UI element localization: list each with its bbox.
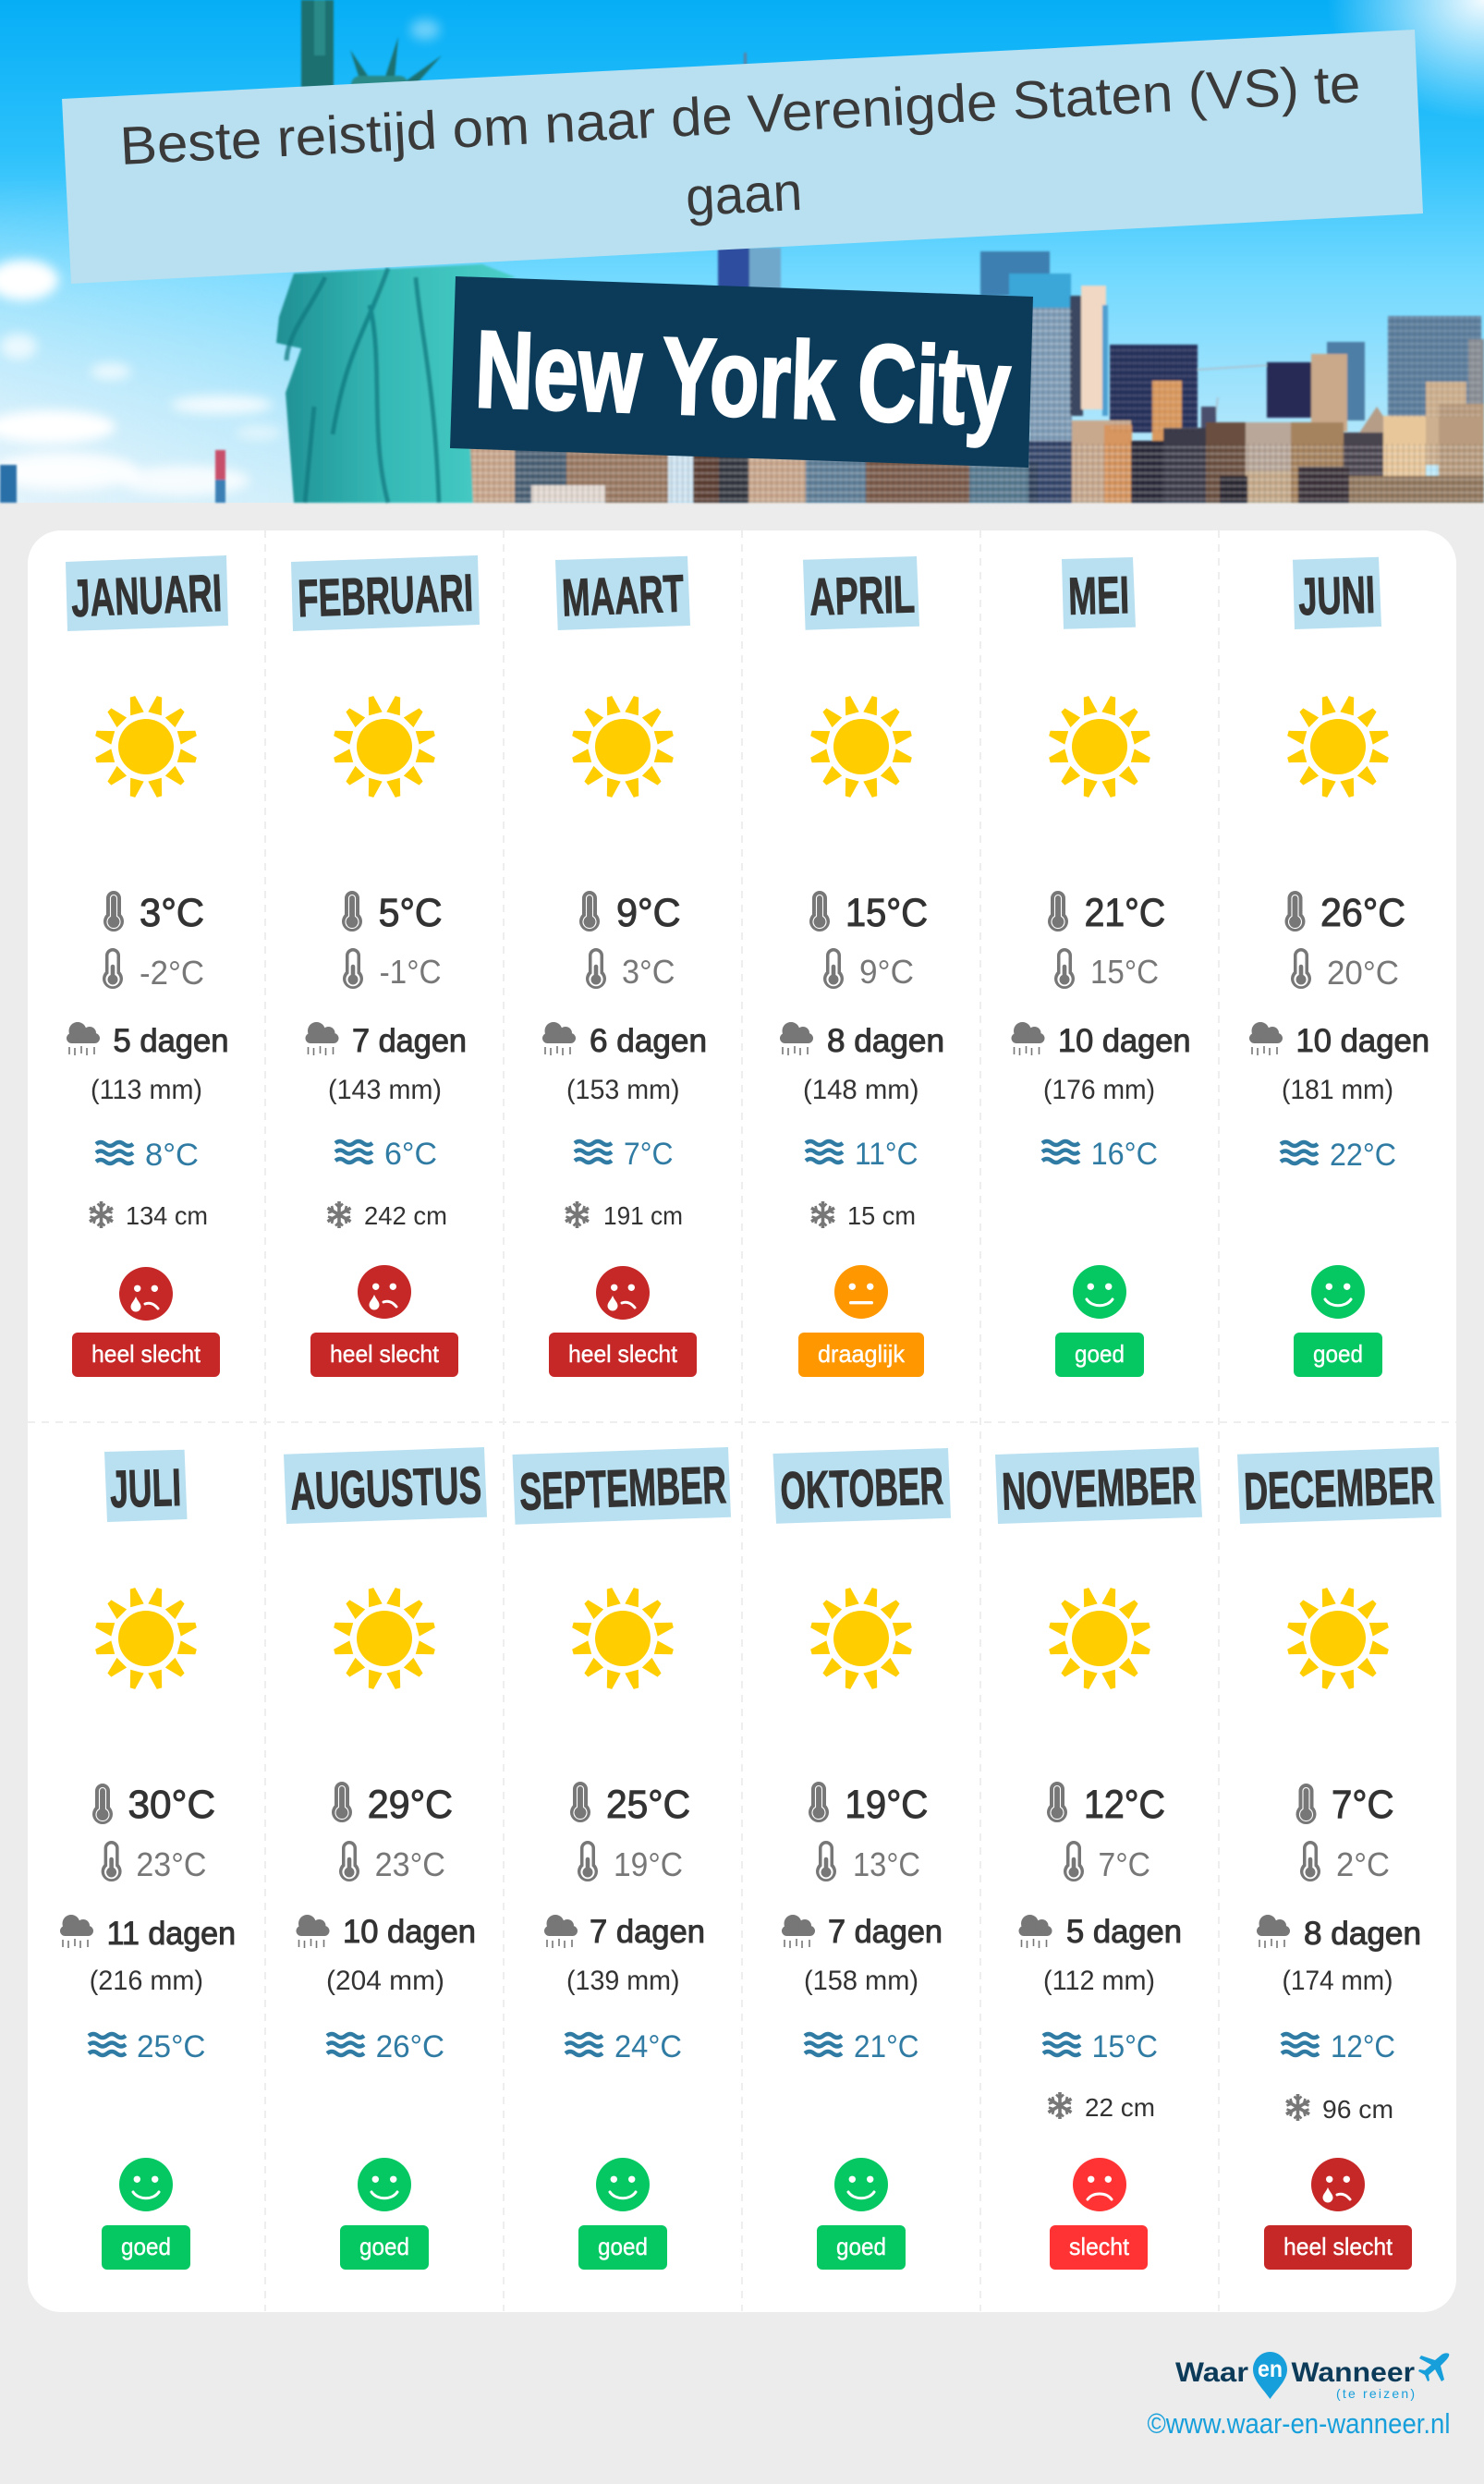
low temperature [816,1841,920,1883]
low temperature [339,1841,445,1883]
water temperature: 16°C [1091,1137,1158,1172]
icon: sun [809,695,913,798]
high temperature [1284,891,1405,935]
rating face [596,2158,650,2211]
rainfall: (143 mm) [328,1075,442,1105]
heading: januari [66,555,228,631]
banner: city name: New York City [473,309,1013,449]
icon: sun [94,1587,198,1690]
heading: juni [1293,557,1381,629]
panel: augustus [284,1447,487,2270]
banner: city name [450,276,1033,468]
rain days: 8 dagen [1304,1916,1421,1952]
snow [1048,2092,1155,2122]
rating face [834,1265,888,1319]
panel: mei [1011,557,1190,1377]
rating badge [1264,2225,1412,2270]
high temperature [342,891,443,935]
panel: december [1237,1447,1441,2270]
water temperature [806,1137,918,1172]
rating face [358,1265,411,1319]
water temperature: 8°C [145,1138,199,1173]
snow [327,1201,447,1230]
rating face [119,2158,173,2211]
rain days: 5 dagen [113,1023,229,1059]
rating badge [310,1333,458,1377]
rainfall: (174 mm) [1283,1966,1393,1996]
low temperature [823,948,914,991]
rating badge: goed [1313,1340,1363,1368]
banner: subtitle: Beste reistijd om naar de Verenigde Staten (VS) te [118,54,1362,177]
rating face [1073,2158,1126,2211]
rain days: 5 dagen [1066,1914,1182,1950]
panel: april [780,556,944,1377]
rainfall: (216 mm) [90,1966,203,1996]
low temperature [103,948,204,992]
low temperature [1300,1841,1390,1883]
rain days: 7 dagen [828,1914,943,1950]
rating badge: goed [1075,1340,1125,1368]
rainfall: (112 mm) [1043,1966,1155,1996]
heading: november [995,1447,1202,1524]
website url: ©www.waar-en-wanneer.nl [1148,2407,1451,2440]
high temperature: 19°C [845,1783,928,1827]
rainfall: (113 mm) [91,1075,202,1105]
rain days: 10 dagen [343,1914,476,1950]
rating badge: heel slecht [330,1340,440,1368]
rainfall: (176 mm) [1043,1075,1155,1105]
low temperature [578,1841,683,1883]
heading: augustus: AUGUSTUS [289,1455,482,1522]
rating badge: heel slecht [568,1340,678,1368]
panel: november [995,1447,1202,2270]
low temperature: 7°C [1098,1845,1150,1883]
low temperature [1064,1841,1150,1883]
rating badge [1055,1333,1144,1377]
logo: Waar en Wanneer: (te reizen) [1336,2386,1415,2401]
rating badge: slecht [1069,2233,1130,2260]
low temperature: 3°C [622,953,675,991]
low temperature: 23°C [375,1845,445,1883]
heading: september [512,1447,731,1525]
heading: januari: JANUARI [70,564,223,628]
high temperature: 25°C [606,1783,690,1827]
snow: 134 cm [126,1201,208,1230]
sky-line buildings [718,248,749,294]
low temperature: 19°C [614,1845,683,1883]
water temperature [566,2029,682,2064]
rain days [305,1022,467,1059]
rainfall: (181 mm) [1282,1075,1393,1105]
heading: oktober [772,1448,951,1524]
water temperature [1043,2029,1158,2064]
water temperature [89,2029,205,2064]
high temperature: 21°C [1085,891,1165,935]
high temperature: 5°C [379,891,443,935]
icon: location pin: en [1258,2356,1283,2382]
rating badge [1294,1333,1382,1377]
high temperature: 7°C [1332,1783,1393,1827]
water temperature: 24°C [614,2029,682,2064]
high temperature [332,1782,453,1827]
snow [1286,2094,1393,2124]
rating face [1311,1265,1365,1319]
panel: oktober [772,1448,951,2270]
rating badge: goed [359,2233,409,2260]
snow [811,1201,916,1230]
water temperature [1282,2029,1395,2064]
water temperature: 15°C [1092,2029,1158,2064]
rain days: 8 dagen [827,1023,944,1059]
water temperature: 22°C [1330,1138,1396,1173]
low temperature: 13°C [853,1845,920,1883]
heading: maart [555,556,690,630]
heading: april [803,556,919,630]
icon: sun [333,1587,436,1690]
high temperature [1295,1783,1393,1827]
rain days: 10 dagen [1058,1023,1190,1059]
logo: Waar en Wanneer: Wanneer [1292,2357,1415,2388]
rating badge [340,2225,429,2270]
water temperature [96,1138,199,1173]
low temperature: -1°C [380,953,442,991]
high temperature: 15°C [845,891,928,935]
water temperature: 11°C [855,1137,918,1172]
rating face [834,2158,888,2211]
high temperature [809,1782,928,1827]
low temperature: 2°C [1336,1845,1390,1883]
rainfall: (204 mm) [326,1966,444,1996]
rating badge: heel slecht [1283,2233,1393,2260]
snow: 96 cm [1322,2095,1393,2124]
logo: Waar en Wanneer: Waar [1175,2357,1248,2388]
heading: november: NOVEMBER [1001,1455,1197,1522]
panel: september [512,1447,731,2270]
rating badge [1050,2225,1148,2270]
low temperature: 15°C [1090,953,1159,991]
rain days: 7 dagen [590,1914,705,1950]
rain days: 6 dagen [590,1023,707,1059]
heading: juli [104,1450,187,1522]
snow: 22 cm [1085,2093,1155,2122]
high temperature [103,891,204,935]
snow: 15 cm [847,1201,916,1230]
heading: juli: JULI [109,1458,182,1519]
high temperature: 12°C [1084,1783,1165,1827]
water temperature [1281,1138,1396,1173]
heading: augustus [284,1447,487,1524]
heading: februari [291,555,480,631]
heading: september: SEPTEMBER [518,1455,727,1522]
logo: Waar en Wanneer [1175,2352,1449,2401]
rating badge: draaglijk [818,1340,906,1368]
rating face [119,1267,173,1321]
water temperature: 7°C [624,1137,673,1172]
rain days [542,1022,707,1059]
water temperature [805,2029,918,2064]
icon: sun [809,1587,913,1690]
header: photo of New York skyline [0,0,1484,503]
rating face [358,2158,411,2211]
low temperature [586,948,675,991]
heading: februari: FEBRUARI [297,564,474,628]
rating badge [798,1333,924,1377]
rating face [1311,2158,1365,2211]
panel: juni [1249,557,1429,1377]
rainfall: (139 mm) [566,1966,680,1996]
icon: sun [1048,695,1151,798]
heading: oktober: OKTOBER [780,1456,944,1521]
icon: airplane [1418,2353,1449,2381]
rating badge [102,2225,190,2270]
high temperature [1048,891,1165,935]
high temperature: 29°C [368,1783,453,1827]
high temperature: 30°C [128,1783,215,1827]
icon: sun [333,695,436,798]
statue of liberty [301,0,334,88]
rating badge: goed [836,2233,886,2260]
heading: mei: MEI [1067,566,1130,627]
high temperature: 3°C [140,891,204,935]
heading: juni: JUNI [1297,566,1376,627]
rainfall: (148 mm) [803,1075,918,1105]
water temperature [575,1137,673,1172]
banner: subtitle [62,30,1423,284]
icon: sun [1048,1587,1151,1690]
low temperature [1054,948,1159,991]
low temperature: 23°C [136,1845,206,1883]
heading: april: APRIL [809,565,916,627]
icon: location pin [1253,2352,1287,2399]
rating face [596,1266,650,1320]
rainfall: (153 mm) [566,1075,680,1105]
water temperature [1042,1137,1158,1172]
rain days: 11 dagen [107,1916,236,1952]
snow [90,1201,208,1230]
rating badge [817,2225,906,2270]
rain days: 10 dagen [1295,1023,1429,1059]
water temperature: 6°C [384,1137,437,1172]
water temperature: 12°C [1331,2029,1395,2064]
low temperature [343,948,442,991]
lower buildings under the banner [468,444,515,503]
high temperature [570,1782,690,1827]
snow: 242 cm [364,1201,447,1230]
rating badge: goed [121,2233,171,2260]
low temperature [102,1841,206,1883]
rainfall: (158 mm) [804,1966,918,1996]
snow [566,1201,683,1230]
icon: sun [1286,1587,1390,1690]
heading: maart: MAART [561,564,685,628]
water temperature: 25°C [137,2029,205,2064]
banner: subtitle: gaan [684,162,804,227]
high temperature [579,891,680,935]
icon: sun [571,1587,675,1690]
rain days [67,1022,229,1059]
rating badge: heel slecht [91,1340,201,1368]
low temperature: 9°C [859,953,914,991]
icon: sun [94,695,198,798]
panel: maart [542,556,707,1377]
rain days: 7 dagen [352,1023,467,1059]
water temperature: 26°C [376,2029,444,2064]
water temperature [327,2029,444,2064]
high temperature: 9°C [616,891,680,935]
rating badge [549,1333,697,1377]
icon: sun [1286,695,1390,798]
rating badge [72,1333,220,1377]
icon: sun [571,695,675,798]
panel: months card [28,530,1456,2312]
high temperature [809,891,928,935]
heading: mei [1062,557,1136,629]
rain days [780,1022,944,1059]
low temperature: 20°C [1327,954,1399,992]
water temperature: 21°C [854,2029,918,2064]
panel: januari [66,555,229,1377]
rating face [1073,1265,1126,1319]
rain days [1257,1915,1421,1952]
panel: juli [60,1450,236,2270]
rating badge [578,2225,667,2270]
water temperature [335,1137,437,1172]
low temperature: -2°C [140,954,204,992]
high temperature: 26°C [1320,891,1405,935]
low temperature [1291,948,1399,992]
distant left buildings [215,450,225,480]
high temperature [1047,1782,1165,1827]
snow: 191 cm [603,1201,683,1230]
panel: februari [291,555,480,1377]
rating badge: goed [598,2233,648,2260]
